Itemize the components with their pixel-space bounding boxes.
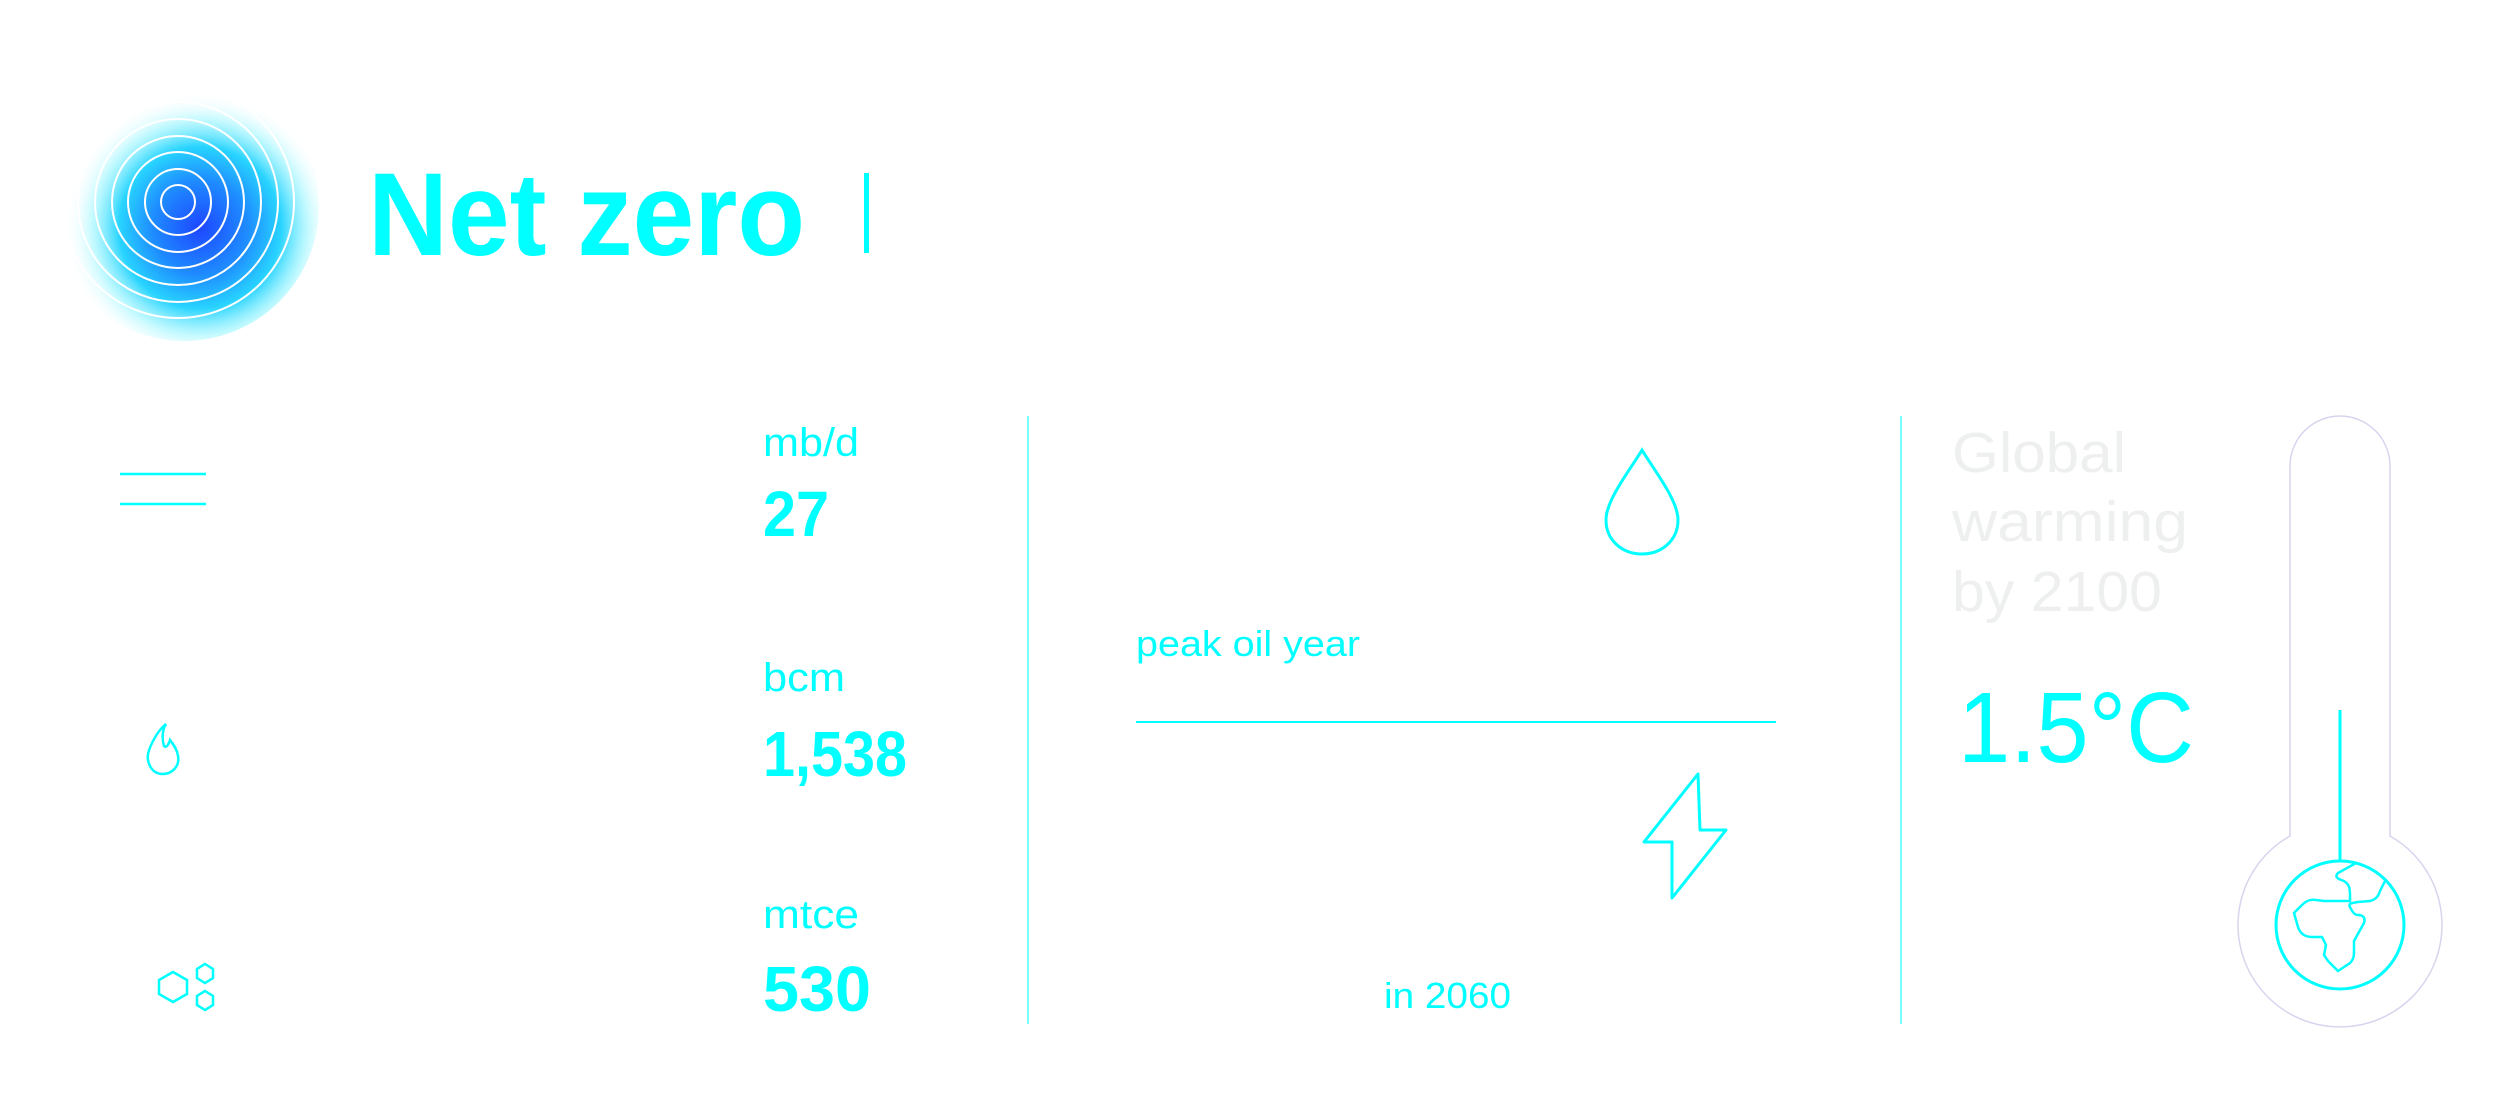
icon: lightning: [1644, 774, 1726, 898]
icon: oil lines: [120, 474, 206, 504]
value: 1.5°C: 1.5°C: [1958, 672, 2194, 784]
divider: [1900, 416, 1902, 1024]
icon: concentric ripple logo: [49, 71, 319, 341]
icon: coal hexagons: [159, 964, 213, 1010]
stat: oil: 27: [763, 478, 829, 550]
heading: global warming: Global: [1952, 421, 2126, 485]
cursor bar: [864, 173, 869, 253]
heading: global warming: by 2100: [1952, 560, 2162, 624]
stat: gas: bcm: [763, 656, 845, 700]
title: Net zero: [368, 149, 805, 281]
stat: coal: mtce: [763, 893, 859, 937]
stat: oil: [763, 421, 859, 550]
divider: [1027, 416, 1029, 1024]
label: peak oil year: peak oil year: [1136, 623, 1360, 664]
stat: gas: 1,538: [763, 718, 907, 790]
icon: flame: [148, 724, 178, 774]
label: in 2060: in 2060: [1384, 975, 1511, 1016]
horizontal line: [1136, 721, 1776, 723]
icon: thermometer with globe: [2238, 416, 2442, 1027]
stat: coal: [763, 893, 871, 1025]
stat: gas: [763, 656, 907, 790]
heading: global warming: warming: [1951, 490, 2188, 554]
stat: oil: mb/d: [763, 421, 859, 465]
icon: oil drop: [1606, 450, 1678, 554]
stat: coal: 530: [763, 953, 871, 1025]
